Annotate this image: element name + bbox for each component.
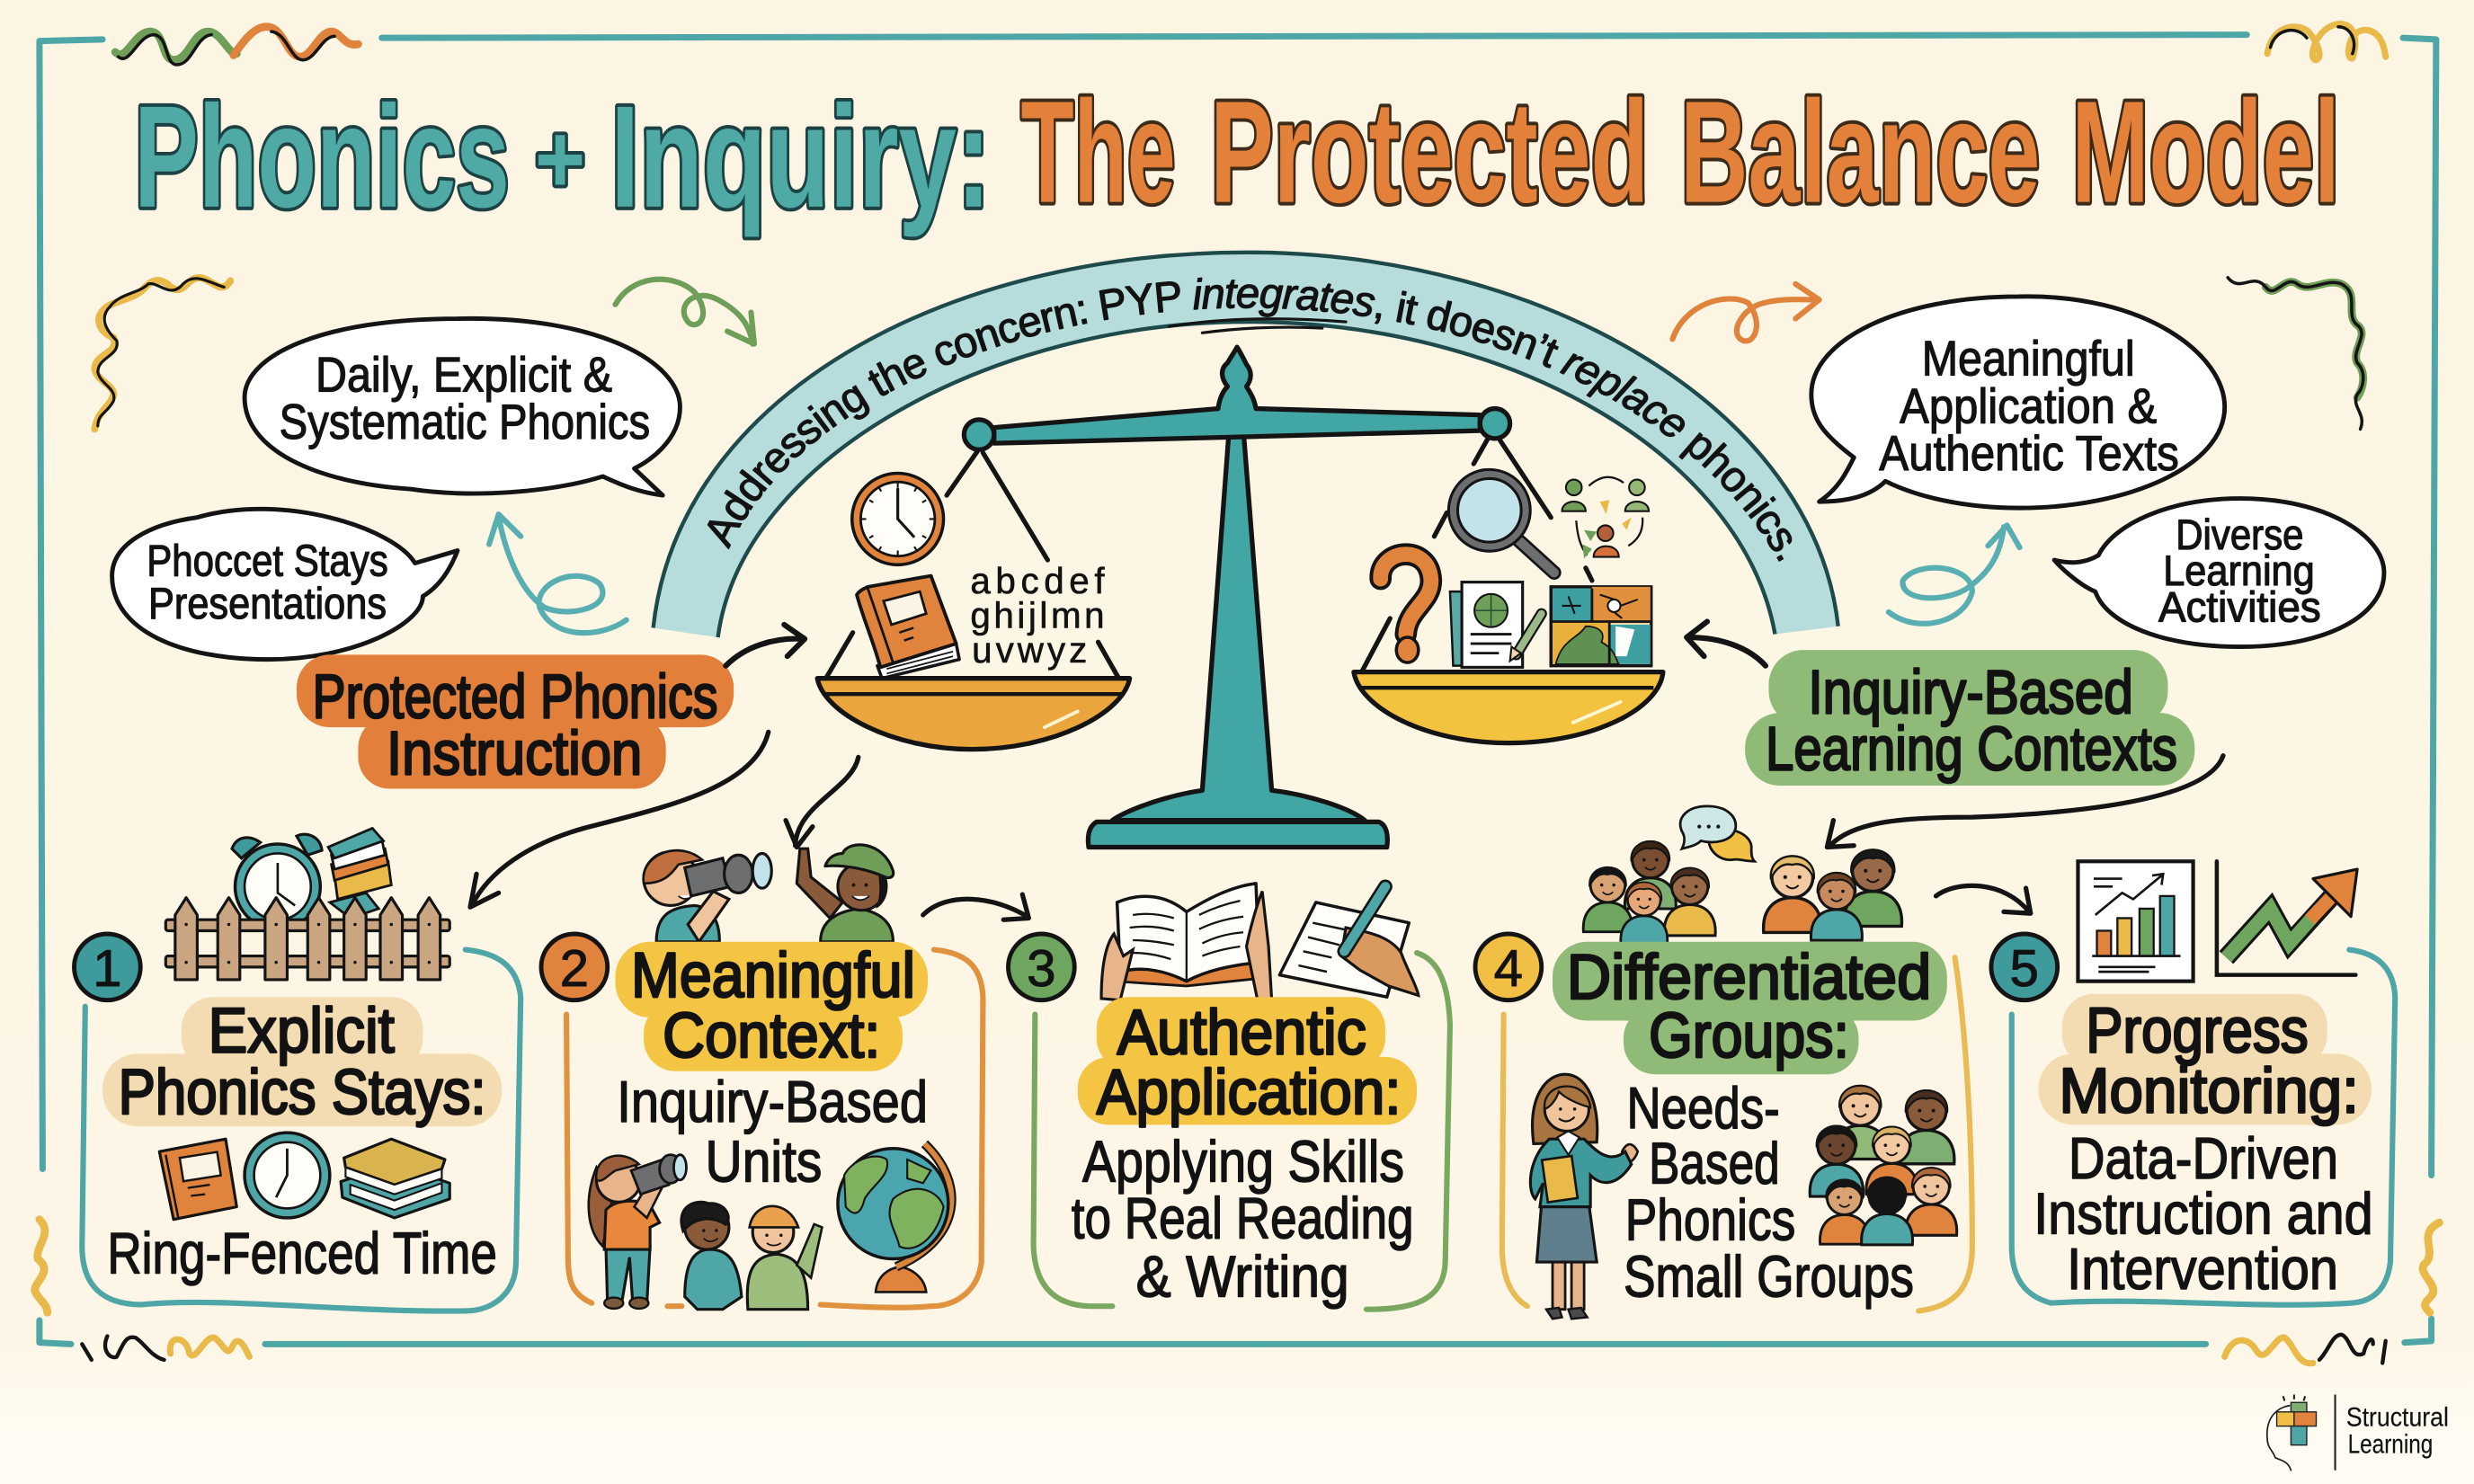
title — [134, 72, 2340, 238]
body 3: to Real Reading — [1072, 1186, 1414, 1251]
body 4: Needs- — [1627, 1075, 1780, 1141]
icon: bar chart report — [2078, 861, 2194, 982]
step 1: explicit phonics stays — [75, 828, 521, 1311]
left pan chains — [827, 451, 1117, 677]
icon: stacked books — [328, 828, 391, 918]
step 4: differentiated groups — [1475, 806, 1972, 1319]
arrow: green curl — [616, 280, 754, 344]
heading 2: Meaningful — [631, 939, 915, 1010]
heading 4: Groups: — [1649, 1000, 1849, 1071]
speech bubble: meaningful application: Meaningful — [1922, 332, 2135, 387]
label: protected phonics instruction: Instruction — [387, 719, 642, 788]
icon: rising arrow graph — [2217, 861, 2357, 975]
speech bubble: diverse activities: Activities — [2158, 583, 2321, 631]
label: protected phonics instruction — [297, 654, 734, 789]
body 5: Intervention — [2067, 1236, 2338, 1302]
body 2 — [617, 1069, 928, 1195]
icon: clock — [245, 1133, 330, 1218]
title part two: Balance — [1680, 72, 2040, 234]
logo: structural learning — [2267, 1394, 2449, 1471]
arrow: orange curl — [1672, 284, 1820, 341]
icon: document and pencil — [1450, 582, 1542, 667]
body 5 — [2033, 1125, 2373, 1302]
scale stand — [1112, 429, 1365, 821]
body 4: Based — [1649, 1130, 1780, 1195]
label: protected phonics instruction: Protected Phonics — [313, 662, 718, 732]
number badge 5: 5 — [2010, 940, 2039, 998]
panel outline 1 — [82, 950, 521, 1311]
icon: crowd left — [1583, 841, 1715, 944]
body 4: Small Groups — [1624, 1244, 1914, 1310]
right pan — [1354, 672, 1663, 743]
speech bubble: meaningful application — [1811, 297, 2225, 508]
title part two — [1021, 72, 2340, 234]
number badge 4: 4 — [1494, 940, 1523, 998]
speech bubble: diverse activities — [2054, 499, 2384, 647]
icon: girl with binoculars — [589, 1155, 686, 1309]
arrow: teal curl left — [489, 514, 627, 633]
label: inquiry-based learning contexts — [1745, 650, 2194, 786]
speech bubble: phoccet stays — [112, 509, 458, 660]
heading 3 — [1078, 996, 1417, 1127]
speech bubble: meaningful application: Application & — [1900, 378, 2157, 433]
scale beam — [994, 347, 1480, 443]
title part two: The — [1021, 72, 1176, 234]
logo icon — [2267, 1394, 2316, 1471]
speech bubble: daily phonics — [245, 318, 680, 495]
heading 2: Context: — [663, 1000, 880, 1071]
heading 2 — [616, 939, 928, 1071]
speech bubble: diverse activities: Diverse — [2176, 511, 2303, 559]
icon: books — [341, 1139, 449, 1218]
icon: magnifying glass — [1453, 474, 1554, 573]
body 3 — [1072, 1129, 1414, 1310]
panel outline 4 — [1502, 957, 1972, 1311]
icon: alarm clock — [232, 834, 322, 929]
curly arrows — [489, 280, 2020, 633]
panel outline 2 — [566, 950, 983, 1308]
logo wordmark: Structural — [2346, 1403, 2449, 1433]
icon: speech bubbles — [1680, 806, 1755, 861]
heading 3: Application: — [1097, 1056, 1402, 1127]
speech bubble: diverse activities: Learning — [2163, 547, 2315, 595]
icon: group network — [1562, 477, 1649, 558]
title part one: + — [535, 104, 585, 214]
body 3: & Writing — [1136, 1244, 1349, 1310]
arrow: step four to five — [1936, 885, 2031, 913]
panel outline 5 — [2012, 950, 2395, 1305]
heading 3: Authentic — [1117, 996, 1366, 1067]
icon: open book with hands — [1101, 884, 1272, 1000]
heading 1: Phonics Stays: — [119, 1056, 486, 1127]
speech bubble: daily phonics: Systematic Phonics — [280, 395, 650, 449]
icon: writing hand — [1279, 886, 1419, 997]
arrow: to step one — [470, 732, 769, 907]
heading 4 — [1553, 941, 1947, 1074]
icon: teacher — [1530, 1074, 1638, 1319]
step 3: authentic application — [1009, 884, 1450, 1310]
speech bubble: phoccet stays: Presentations — [148, 580, 387, 628]
icon: boy with green cap — [796, 845, 894, 942]
icon: puzzle map — [1551, 587, 1651, 666]
balance scale — [817, 347, 1663, 847]
label: inquiry-based learning contexts: Inquiry-Based — [1808, 657, 2133, 726]
icon: book — [159, 1139, 236, 1220]
title part two: Protected — [1210, 72, 1649, 234]
body 2: Inquiry-Based — [617, 1069, 928, 1134]
arrow: to step two — [786, 757, 859, 847]
heading 5: Progress — [2086, 995, 2309, 1066]
icon: wall clock — [852, 474, 944, 564]
body 3: Applying Skills — [1082, 1129, 1404, 1195]
arrow: inquiry to right pan — [1686, 621, 1766, 666]
icon: question mark — [1381, 555, 1431, 662]
icon: boy with binoculars — [644, 850, 771, 942]
logo wordmark — [2346, 1403, 2449, 1459]
alphabet letters: abcdef — [970, 560, 1105, 601]
number badge 3: 3 — [1027, 940, 1055, 998]
body 4 — [1624, 1075, 1914, 1310]
panel outline 3 — [1034, 953, 1450, 1310]
body 5: Data-Driven — [2069, 1125, 2338, 1191]
speech bubble: meaningful application: Authentic Texts — [1879, 426, 2179, 481]
alphabet letters: uvwyz — [972, 629, 1087, 671]
number badge 5 — [1991, 934, 2058, 1000]
arrow: protected to left pan — [725, 625, 805, 666]
right pan chains — [1362, 439, 1592, 672]
number badge 1: 1 — [93, 940, 121, 998]
title part one — [134, 76, 991, 238]
label: inquiry-based learning contexts: Learning Contexts — [1766, 714, 2177, 783]
left pan — [817, 679, 1130, 750]
step 2: meaningful context — [541, 845, 983, 1310]
number badge 2: 2 — [560, 940, 589, 998]
alphabet letters: ghijlmn — [970, 595, 1105, 636]
connector arrows — [470, 621, 2223, 920]
icon: picket fence — [165, 898, 449, 980]
heading 5 — [2039, 994, 2372, 1125]
step 5: progress monitoring — [1991, 861, 2395, 1305]
caption 1: Ring-Fenced Time — [107, 1220, 497, 1285]
number badge 1 — [75, 934, 140, 1000]
body 2: Units — [706, 1129, 822, 1195]
body 4: Phonics — [1625, 1186, 1795, 1252]
alphabet letters — [970, 560, 1105, 671]
icon: orange book — [857, 576, 959, 679]
arrow: to step four — [1827, 756, 2223, 847]
heading 1 — [102, 995, 502, 1127]
arrow: teal curl right — [1889, 525, 2020, 624]
title part one: Inquiry: — [610, 76, 991, 238]
speech bubble: daily phonics: Daily, Explicit & — [316, 347, 612, 402]
speech bubble: phoccet stays: Phoccet Stays — [147, 538, 388, 586]
number badge 3 — [1009, 934, 1074, 1000]
heading 5: Monitoring: — [2059, 1054, 2359, 1125]
number badge 4 — [1475, 934, 1542, 1000]
curved banner: Addressing the concern: PYP integrates, it doesn’t replace phonics. — [707, 277, 1793, 562]
icon: crowd right — [1764, 849, 1901, 940]
number badge 2 — [541, 934, 608, 1000]
heading 1: Explicit — [209, 995, 395, 1066]
logo wordmark: Learning — [2348, 1429, 2433, 1459]
icon: two explorers — [681, 1203, 822, 1310]
icon: small group children — [1810, 1086, 1957, 1245]
icon: globe — [838, 1143, 951, 1292]
arrow: step two to three — [923, 894, 1028, 920]
title part one: Phonics — [134, 76, 510, 238]
heading 4: Differentiated — [1567, 941, 1931, 1012]
body 5: Instruction and — [2033, 1180, 2373, 1246]
